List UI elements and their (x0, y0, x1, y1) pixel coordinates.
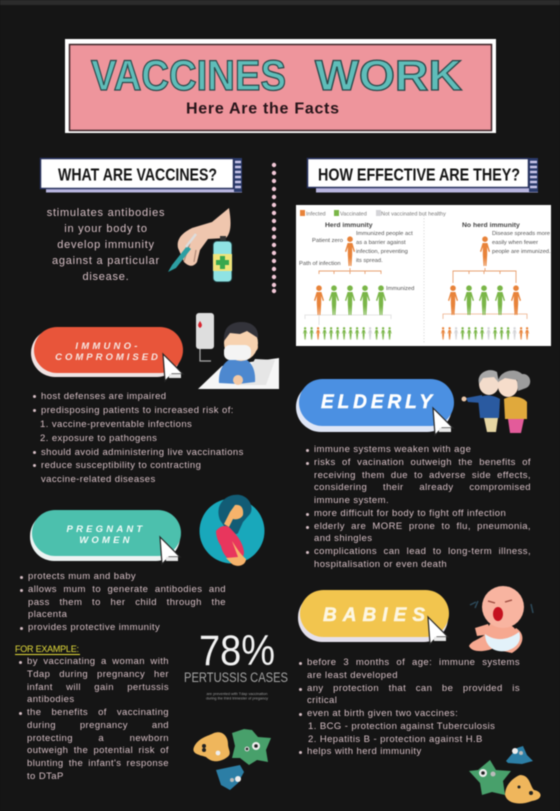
text: immunocompromised list: 2. exposure to pathogens (40, 433, 157, 444)
statistic: 78 percent (184, 627, 288, 700)
text: example list: outweigh the potential risk of (27, 745, 169, 756)
right panel (462, 222, 551, 255)
title banner (65, 39, 496, 133)
button: elderly: ELDERLY (321, 392, 434, 413)
left panel: infection, preventing (356, 249, 408, 255)
icon: crying baby (469, 586, 533, 653)
heading: how effective are they (308, 158, 538, 192)
left panel: its spread. (356, 258, 383, 264)
text: what are vaccines: in your body to (64, 223, 148, 235)
text: babies list: 1. BCG - protection against Tuberculosis (308, 721, 495, 732)
text: pregnant women list: pass them to her child through the (28, 596, 226, 608)
text: example list: to DTaP (27, 771, 64, 782)
text: babies list: 2. Hepatitis B - protection against H.B (308, 734, 483, 744)
text: elderly list: risks of vacination outweigh the benefits of (314, 457, 531, 468)
left panel: Immunized people act (356, 231, 413, 237)
icon: sick patient with IV (196, 313, 279, 389)
text: pregnant women list: provides protective immunity (28, 622, 160, 633)
left panel (299, 222, 414, 292)
legend: Vaccinated (340, 212, 367, 218)
text: example list: during pregnancy and (27, 720, 169, 731)
dotted divider (272, 163, 276, 293)
button: immunocompromised: IMMUNO- (75, 341, 141, 352)
text: example list: antibodies (27, 694, 75, 705)
text: elderly list: receiving them due to adverse side effects, (314, 470, 531, 480)
text: what are vaccines (46, 207, 165, 283)
text: babies list: before 3 months of age: immune systems (307, 657, 520, 668)
text: elderly list: immune system. (314, 495, 389, 506)
heading: what are vaccines: WHAT ARE VACCINES? (58, 164, 217, 184)
button: babies: BABIES (323, 605, 425, 626)
text: elderly list: elderly are MORE prone to flu, pneumonia, (314, 520, 531, 532)
text: immunocompromised list: reduce susceptibility to contracting (41, 460, 201, 471)
text: immunocompromised list: vaccine-related diseases (41, 474, 156, 485)
text: elderly list: and shingles (314, 533, 372, 544)
text: example list: the benefits of vaccinating (27, 707, 169, 718)
left panel: Herd immunity (325, 222, 373, 229)
text: babies list: are least developed (307, 670, 398, 681)
text: example list: infant will gain pertussis (27, 682, 169, 692)
button: immunocompromised (31, 327, 183, 381)
button: immunocompromised: COMPROMISED (55, 352, 161, 363)
text: elderly list: considering their already compromised (314, 482, 531, 493)
legend (300, 210, 446, 218)
diagram: herd immunity (296, 205, 551, 346)
left panel: as a barrier against (356, 240, 406, 246)
icon: elderly couple (462, 370, 530, 433)
text: immunocompromised list: host defenses are impaired (41, 391, 167, 402)
button: babies (298, 590, 449, 644)
text: babies list: helps with herd immunity (307, 746, 422, 757)
text: example list (18, 656, 170, 782)
icon: germs right (469, 746, 541, 803)
title text: VACCINES (91, 52, 286, 100)
text: elderly list (305, 444, 532, 570)
title text: WORK (315, 52, 462, 100)
text: example list: Tdap during pregnancy her (27, 669, 169, 680)
text: babies list: critical (307, 695, 337, 706)
heading: how effective are they: HOW EFFECTIVE ARE THEY? (318, 164, 520, 184)
subtitle: Here Are the Facts (186, 100, 339, 118)
text: elderly list: complications can lead to long-term illness, (314, 546, 531, 557)
text: babies list: even at birth given two vaccines: (307, 708, 458, 719)
button: pregnant women: PREGNANT (67, 524, 145, 535)
text: what are vaccines: develop immunity (57, 239, 155, 251)
text: pregnant women list: allows mum to generate antibodies and (28, 584, 226, 595)
text: pregnant women list (19, 571, 226, 633)
text: babies list (298, 657, 520, 757)
title text (91, 52, 462, 100)
left panel: Immunized (386, 286, 414, 292)
text: what are vaccines: stimulates antibodies (47, 207, 165, 219)
statistic: 78 percent: are prevented with Tdap vaccination (207, 692, 267, 696)
text: immunocompromised list: should avoid administering live vaccinations (41, 447, 244, 458)
underlined label: for example: FOR EXAMPLE: (15, 644, 79, 654)
text: elderly list: immune systems weaken with age (314, 444, 471, 455)
text: babies list: any protection that can be provided is (307, 682, 520, 694)
heading: what are vaccines (40, 158, 242, 192)
left panel: Path of infection (299, 261, 341, 267)
statistic: 78 percent: PERTUSSIS CASES (184, 670, 288, 685)
right panel: Disease spreads more (492, 231, 550, 237)
text: elderly list: more difficult for body to fight off infection (314, 508, 506, 519)
text: elderly list: hospitalisation or even death (314, 559, 447, 570)
legend: Not vaccinated but healthy (381, 212, 446, 218)
right panel: people are immunized. (492, 249, 551, 255)
text: immunocompromised list (32, 391, 244, 485)
left panel: Patient zero (312, 238, 343, 244)
text: example list: blunting the infant's response (27, 758, 169, 769)
legend: Infected (306, 212, 326, 218)
text: pregnant women list: protects mum and baby (28, 571, 136, 582)
right panel: easily when fewer (492, 240, 538, 246)
top band (0, 0, 560, 5)
icon: pregnant woman (200, 495, 264, 566)
text: example list: protecting a newborn (27, 732, 169, 744)
text: example list: by vaccinating a woman with (27, 656, 169, 667)
text: immunocompromised list: 1. vaccine-preventable infections (40, 419, 192, 430)
text: pregnant women list: placenta (28, 609, 67, 620)
text: what are vaccines: against a particular (52, 255, 160, 267)
statistic: 78 percent: during the third trimester of pregancy (206, 696, 268, 700)
text: immunocompromised list: predisposing patients to increased risk of: (41, 405, 234, 416)
statistic: 78 percent: 78% (199, 627, 275, 675)
icon: germs left (193, 729, 271, 790)
button: pregnant women (30, 510, 181, 564)
right panel: No herd immunity (462, 222, 520, 229)
icon: hand with syringe and vial (168, 208, 232, 282)
text: what are vaccines: disease. (82, 271, 129, 283)
button: pregnant women: WOMEN (79, 535, 133, 546)
button: elderly (296, 379, 454, 435)
